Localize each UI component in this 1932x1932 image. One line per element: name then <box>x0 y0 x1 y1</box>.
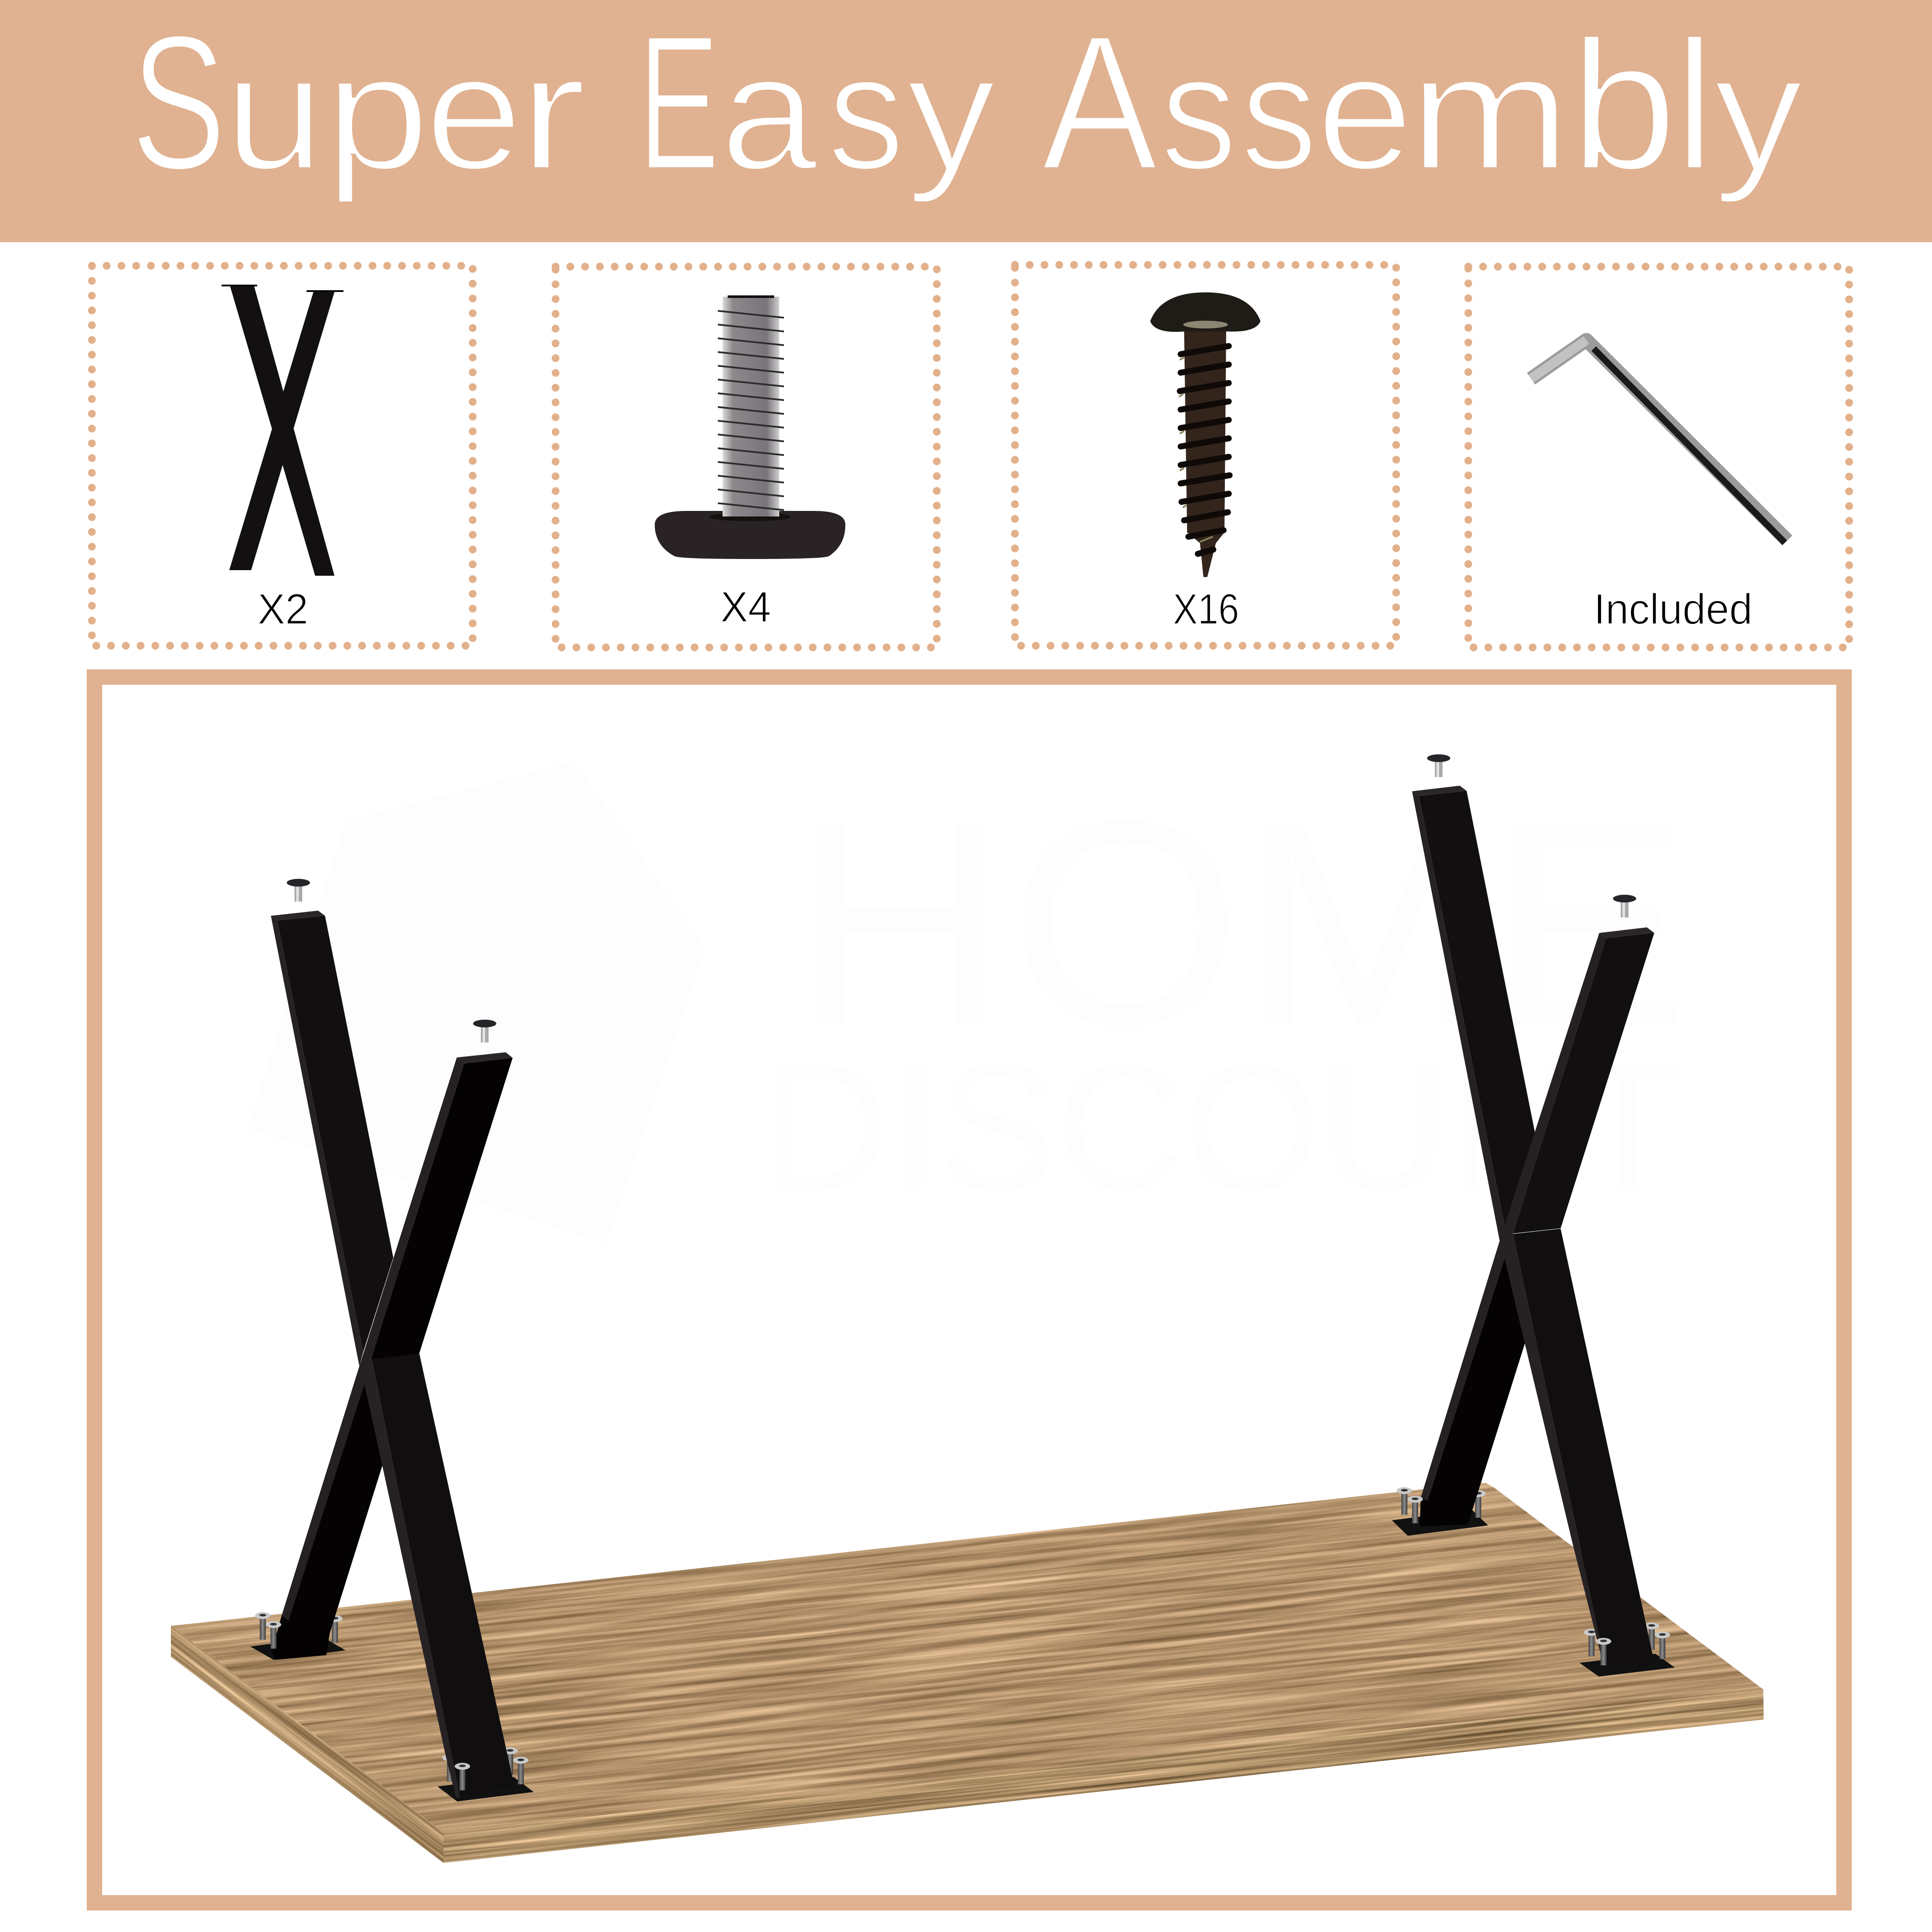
title: E <box>638 0 720 210</box>
label: Included: Included <box>1594 585 1753 633</box>
rear lower arm <box>1420 1248 1528 1527</box>
bolts in front of legs <box>266 1496 1670 1790</box>
title: u <box>224 20 325 204</box>
label: X4: X4 <box>720 583 771 631</box>
title banner <box>0 0 1932 242</box>
title: s <box>828 20 904 204</box>
bolts behind legs <box>255 1487 1659 1782</box>
panel: X legs, quantity 2 <box>92 266 473 646</box>
title: e <box>425 20 522 204</box>
icon: X-shaped table leg <box>222 285 343 576</box>
icon: wood screw <box>1150 292 1261 577</box>
title: y <box>907 20 996 205</box>
pole A upper arm <box>1412 786 1535 1241</box>
title: S <box>131 0 226 210</box>
front lower arm <box>1501 1229 1655 1665</box>
title: m <box>1409 20 1571 204</box>
watermark text: DISCOUNT <box>762 1027 1683 1228</box>
label: X16: X16 <box>1173 585 1239 633</box>
left X leg <box>271 911 513 1798</box>
title: l <box>1674 3 1715 209</box>
rear lower arm <box>272 1376 385 1660</box>
pole A upper arm <box>271 911 393 1366</box>
front lower arm <box>361 1354 513 1798</box>
title: a <box>720 20 818 204</box>
table front edge <box>444 1689 1764 1863</box>
panel: wood screws, quantity 16 <box>1015 265 1396 646</box>
title: s <box>1241 20 1317 204</box>
title: y <box>1714 20 1803 205</box>
mounting plates <box>250 1510 1675 1801</box>
title: r <box>518 20 587 204</box>
leveling pegs above leg tops <box>287 754 1636 1042</box>
table surface wood grain <box>171 1483 1763 1832</box>
pole B upper arm <box>282 1052 513 1621</box>
title: A <box>1042 0 1158 210</box>
panel: leveling feet, quantity 4 <box>556 267 937 647</box>
panel: assembled table illustration frame <box>94 677 1844 1903</box>
title: p <box>325 20 430 205</box>
icon: Allen hex key <box>1531 340 1787 543</box>
watermark logo <box>247 761 705 1244</box>
right X leg <box>1412 786 1655 1665</box>
pole B upper arm <box>1421 927 1654 1501</box>
watermark text: HOME <box>793 760 1689 1086</box>
panel: hex key, included <box>1468 267 1849 647</box>
table side edge <box>171 1626 444 1863</box>
title: e <box>1316 20 1413 204</box>
title: b <box>1570 3 1677 209</box>
watermark text <box>762 760 1689 1228</box>
label: X2: X2 <box>258 585 308 633</box>
icon: threaded leveling foot <box>655 295 845 559</box>
title: s <box>1160 20 1237 204</box>
table top <box>129 1434 1844 1881</box>
